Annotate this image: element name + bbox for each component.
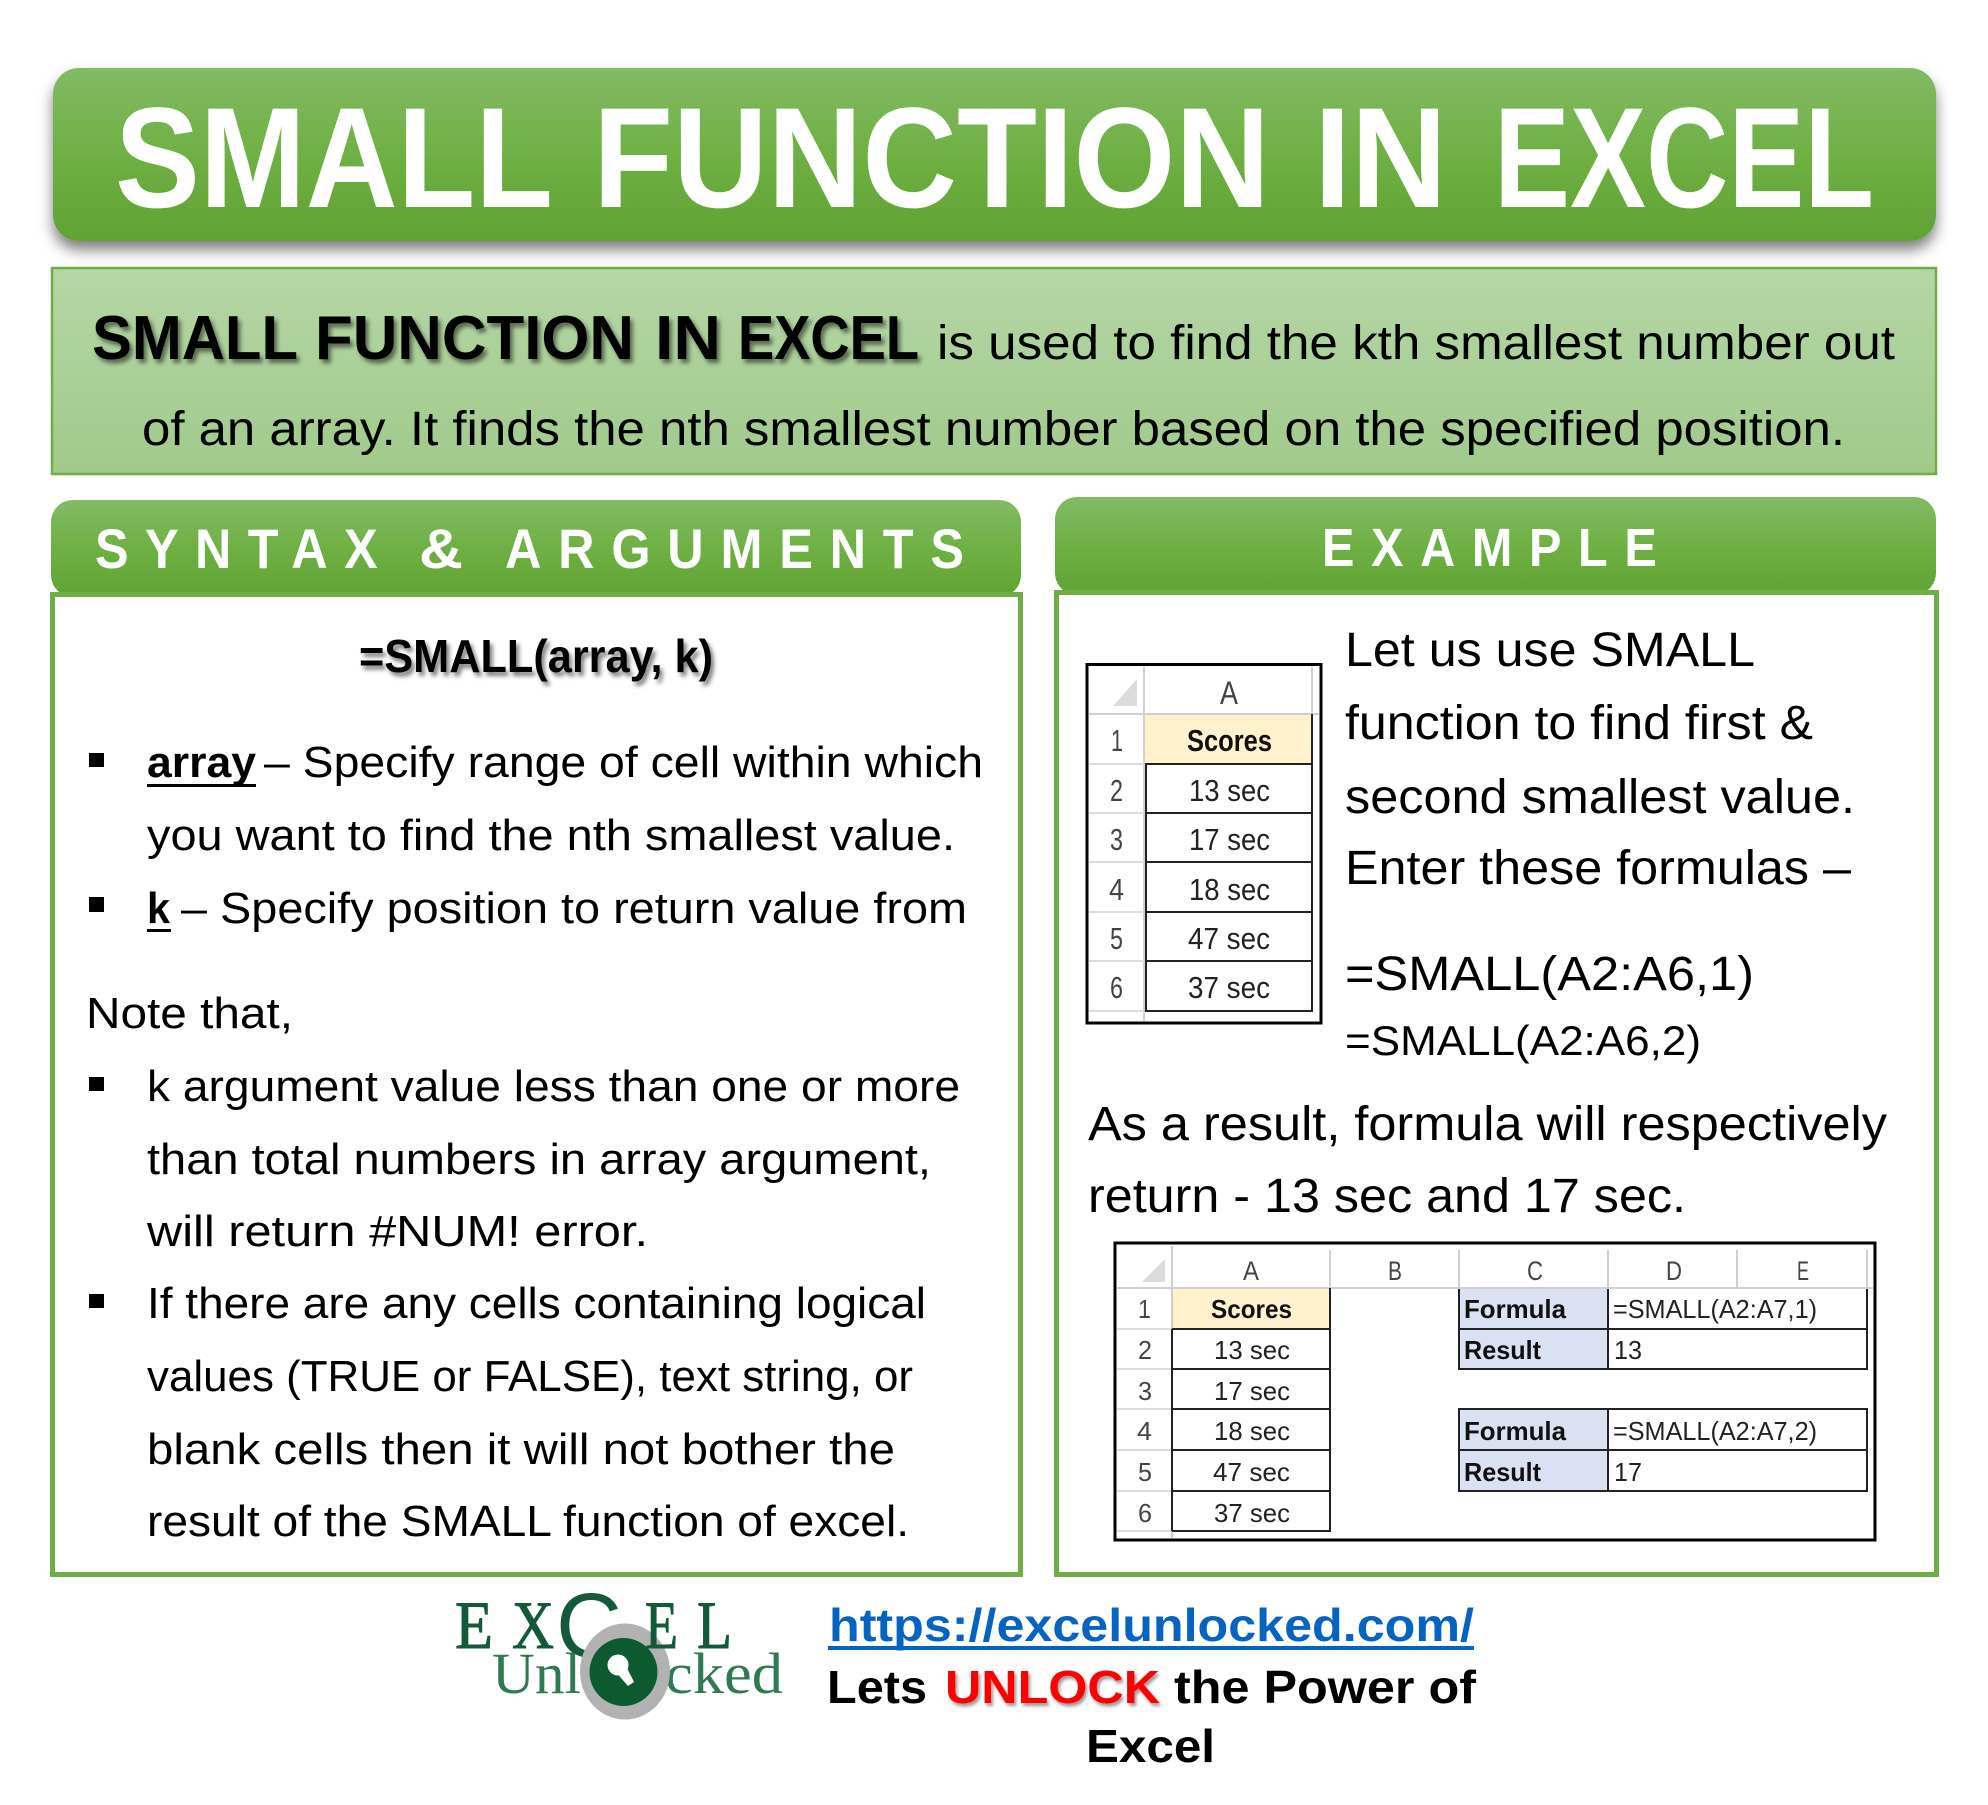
logo: Excel Unlocked: E [455, 1587, 493, 1663]
note: logical values: blank cells then it will not bother the [147, 1425, 895, 1474]
syntax heading [95, 517, 964, 581]
example heading: EXAMPLE [1322, 517, 1657, 578]
logo: Excel Unlocked [455, 1575, 783, 1720]
argument: array: you want to find the nth smallest value. [147, 811, 955, 860]
title text: IN [1314, 79, 1447, 238]
result worksheet table: Result [1464, 1335, 1541, 1365]
source data table: 4 [1109, 872, 1124, 907]
note: k argument [89, 1062, 960, 1256]
title text: FUNCTION [593, 79, 1270, 238]
example header bar [1055, 497, 1936, 595]
result worksheet table: D [1666, 1256, 1682, 1286]
title text: SMALL [115, 79, 553, 238]
result worksheet table: 17 sec [1214, 1376, 1290, 1406]
source data table: 5 [1110, 921, 1123, 956]
formula syntax: =SMALL(array, k) [359, 630, 713, 682]
panel: syntax and arguments [51, 500, 1021, 1574]
tagline [827, 1661, 1477, 1772]
result worksheet table: Scores [1211, 1294, 1292, 1324]
result worksheet table [1115, 1243, 1875, 1540]
syntax heading: & [419, 517, 463, 580]
result worksheet table: Formula [1464, 1294, 1567, 1324]
result explanation: As a result, formula will respectively [1088, 1098, 1887, 1151]
tagline: Lets [827, 1661, 927, 1713]
result worksheet table: 5 [1138, 1457, 1152, 1487]
logo: Excel Unlocked: Unl [492, 1641, 581, 1706]
source data table: A [1220, 675, 1239, 711]
source data table: 6 [1110, 970, 1123, 1005]
syntax header bar [51, 500, 1021, 597]
result worksheet table: Formula [1464, 1416, 1567, 1446]
example instructions: Let us use SMALL [1345, 624, 1755, 677]
example instructions: Enter these formulas – [1345, 842, 1851, 895]
definition bold heading: IN [655, 304, 721, 373]
syntax heading: ARGUMENTS [505, 519, 964, 581]
result worksheet table: 47 sec [1213, 1457, 1290, 1487]
source data table [1087, 664, 1321, 1023]
source data table: 47 sec [1188, 921, 1270, 956]
result worksheet table: 13 [1614, 1335, 1642, 1365]
tagline: the Power of [1174, 1661, 1477, 1713]
source data table: 17 sec [1189, 822, 1270, 857]
note heading: Note that, [86, 989, 293, 1038]
result worksheet table: 3 [1138, 1376, 1152, 1406]
source data table: 2 [1110, 773, 1123, 808]
result explanation [1088, 1098, 1887, 1223]
title text: EXCEL [1494, 79, 1874, 238]
argument: array: – Specify range of cell within which [264, 738, 983, 787]
syntax heading: SYNTAX [95, 519, 378, 581]
result worksheet table: =SMALL(A2:A7,2) [1613, 1416, 1817, 1446]
source data table: 1 [1111, 723, 1123, 758]
argument: array [89, 738, 983, 860]
syntax panel frame [52, 594, 1020, 1574]
formula 2: =SMALL(A2:A6,2) [1345, 1017, 1701, 1064]
example instructions: function to find first & [1345, 697, 1813, 750]
title banner [53, 68, 1936, 241]
result worksheet table: 6 [1138, 1498, 1152, 1528]
result worksheet table: 2 [1138, 1335, 1152, 1365]
formula 1: =SMALL(A2:A6,1) [1345, 948, 1754, 1001]
result worksheet table: 4 [1137, 1416, 1152, 1446]
definition bold heading [92, 304, 919, 373]
logo: Excel Unlocked: o [592, 1641, 652, 1706]
result worksheet table: E [1797, 1256, 1809, 1286]
definition bold heading: FUNCTION [315, 304, 634, 373]
title text [115, 79, 1874, 238]
source data table: 3 [1110, 822, 1123, 857]
note: k argument: will return #NUM! error. [146, 1207, 648, 1256]
source data table: 13 sec [1189, 773, 1270, 808]
note: logical values: If there are any cells containing logical [147, 1279, 926, 1328]
logo: Excel Unlocked: cked [665, 1641, 783, 1706]
source data table: 37 sec [1188, 970, 1270, 1005]
result worksheet table: A [1243, 1256, 1259, 1286]
definition bold heading: SMALL [92, 304, 298, 373]
result worksheet table: 17 [1614, 1457, 1642, 1487]
panel: definition [52, 268, 1936, 474]
result worksheet table: 18 sec [1214, 1416, 1290, 1446]
result worksheet table: Result [1464, 1457, 1541, 1487]
example instructions [1345, 624, 1855, 895]
website link: https://excelunlocked.com/ [829, 1599, 1474, 1651]
definition bold heading: EXCEL [738, 304, 919, 373]
argument: k: – Specify position to return value from [181, 884, 967, 933]
definition line 1: is used to find the kth smallest number out [937, 317, 1895, 370]
logo: Excel Unlocked: C [556, 1575, 622, 1677]
argument: k: k [147, 884, 170, 933]
tagline: Excel [1086, 1720, 1215, 1772]
panel: example [1055, 497, 1936, 1574]
result worksheet table: 13 sec [1214, 1335, 1290, 1365]
logo: Excel Unlocked: X [512, 1587, 554, 1663]
logo: Excel Unlocked: L [697, 1587, 732, 1663]
result worksheet table: 37 sec [1214, 1498, 1290, 1528]
footer link and tagline [827, 1599, 1477, 1772]
result worksheet table: =SMALL(A2:A7,1) [1613, 1294, 1817, 1324]
result worksheet table: B [1388, 1256, 1402, 1286]
result explanation: return - 13 sec and 17 sec. [1088, 1170, 1686, 1223]
argument: array: array [147, 738, 257, 787]
note: k argument: than total numbers in array argument, [147, 1135, 931, 1184]
source data table: 18 sec [1189, 872, 1270, 907]
definition line 2: of an array. It finds the nth smallest number based on the specified position. [142, 403, 1845, 456]
tagline: UNLOCK [945, 1661, 1160, 1713]
result worksheet table: C [1527, 1256, 1543, 1286]
note: logical values [89, 1279, 926, 1546]
result worksheet table: 1 [1138, 1294, 1151, 1324]
example panel frame [1056, 592, 1936, 1574]
logo: Excel Unlocked: E [645, 1587, 678, 1663]
note: logical values: values (TRUE or FALSE), text string, or [147, 1352, 913, 1401]
example instructions: second smallest value. [1345, 771, 1855, 824]
source data table: Scores [1187, 723, 1272, 758]
note: k argument: k argument value less than one or more [147, 1062, 960, 1111]
note: logical values: result of the SMALL function of excel. [147, 1497, 909, 1546]
